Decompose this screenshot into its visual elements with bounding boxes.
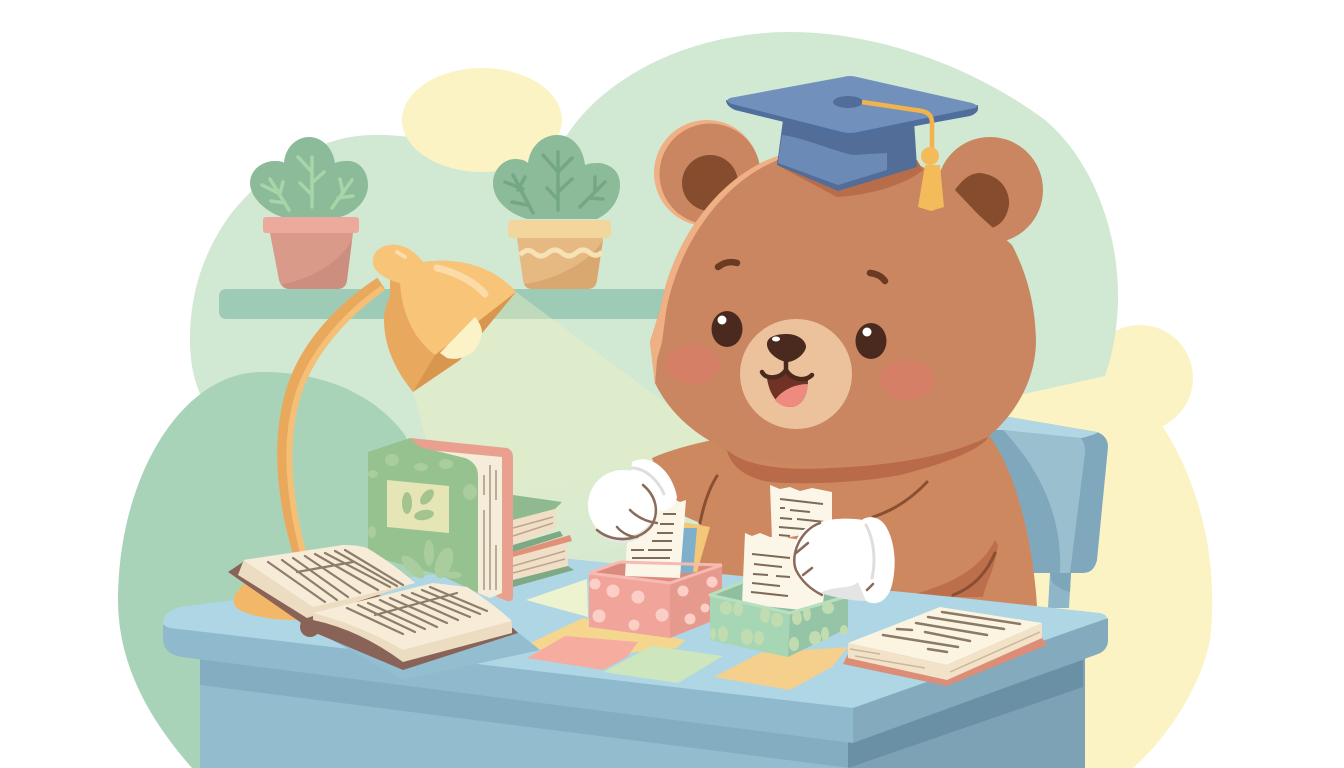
box dots (590, 576, 718, 630)
blue card (678, 528, 697, 573)
pink note (527, 636, 638, 670)
box rim (710, 582, 848, 613)
chair post (1048, 573, 1071, 608)
pot (270, 233, 353, 289)
paper top (848, 607, 1042, 665)
bear right ear (937, 137, 1043, 243)
cover (228, 562, 518, 670)
sticky notes (527, 618, 848, 690)
leaves (493, 135, 620, 219)
open book (228, 545, 518, 670)
shadow under open book (300, 600, 540, 680)
paper lines (883, 612, 1020, 652)
pale paper on desk (526, 579, 588, 617)
label leaves (402, 487, 437, 522)
under-lip shadows (200, 655, 850, 768)
box leaf dots (710, 601, 848, 651)
bear (650, 76, 1043, 606)
pot rim (263, 217, 359, 233)
background: darker green blob (118, 372, 480, 768)
note in green box (742, 533, 830, 612)
bear left ear (654, 120, 760, 226)
lamp shade (373, 245, 516, 392)
desk lip (163, 625, 853, 743)
bear mouth (762, 360, 812, 407)
bear eyebrows (718, 262, 885, 281)
box rim (589, 562, 722, 583)
bear nose (767, 334, 806, 362)
stack of books (513, 495, 574, 587)
graduation cap (726, 76, 978, 211)
box left face (710, 595, 790, 657)
green box interior (710, 582, 848, 613)
green leaf box (710, 582, 848, 657)
bear eyes (712, 311, 886, 359)
plant right (493, 135, 620, 289)
cuff (630, 459, 677, 510)
cuff (858, 517, 895, 603)
plant left (250, 137, 368, 289)
yellow note (528, 618, 685, 660)
green cover (368, 438, 478, 593)
background: light green blobs (190, 32, 1118, 620)
pot rim (508, 220, 611, 238)
lamp light beam (413, 292, 715, 600)
desk top (163, 558, 1107, 708)
lamp base (234, 583, 305, 620)
standing green book (368, 438, 513, 601)
leaves (250, 137, 368, 217)
paw (793, 519, 872, 600)
paper sides (848, 623, 1042, 680)
right paw (793, 517, 895, 603)
bear muzzle (740, 319, 852, 429)
leaf veins (505, 152, 605, 213)
desk (163, 558, 1108, 768)
background: right yellow blob (1000, 325, 1212, 768)
fingers (794, 523, 873, 595)
yellow card (680, 522, 710, 572)
desk right side (850, 650, 1085, 768)
body shading and creases (883, 540, 998, 605)
box left face (589, 573, 670, 638)
pink back cover (410, 438, 513, 601)
chin shadow band (727, 437, 988, 483)
bear head (650, 151, 1036, 466)
background: top yellow blob (402, 68, 562, 172)
lamp arm (284, 283, 381, 552)
box right face (670, 565, 722, 638)
paw (588, 470, 658, 540)
red cover (843, 635, 1047, 686)
lamp (234, 245, 516, 620)
note behind right paw (770, 485, 832, 540)
desk front (200, 650, 850, 768)
page lines (268, 550, 487, 634)
stack of papers right (843, 607, 1047, 686)
chair (985, 416, 1108, 608)
pink polka dot box (589, 498, 722, 638)
right page (313, 583, 512, 662)
orange note (714, 647, 848, 690)
box right face (788, 596, 848, 657)
green note (603, 646, 723, 683)
fingers (597, 485, 657, 539)
note in box (625, 498, 686, 578)
left paw (588, 459, 677, 543)
cover label (387, 480, 449, 533)
box interior (589, 562, 722, 583)
pot (517, 238, 603, 289)
pages (395, 447, 502, 598)
bear body (652, 437, 1037, 606)
head highlight (650, 156, 778, 385)
leaf veins (262, 157, 353, 210)
bear cheeks (666, 344, 720, 384)
shelf (219, 289, 669, 319)
left page (238, 545, 415, 618)
cover motifs (368, 454, 477, 582)
